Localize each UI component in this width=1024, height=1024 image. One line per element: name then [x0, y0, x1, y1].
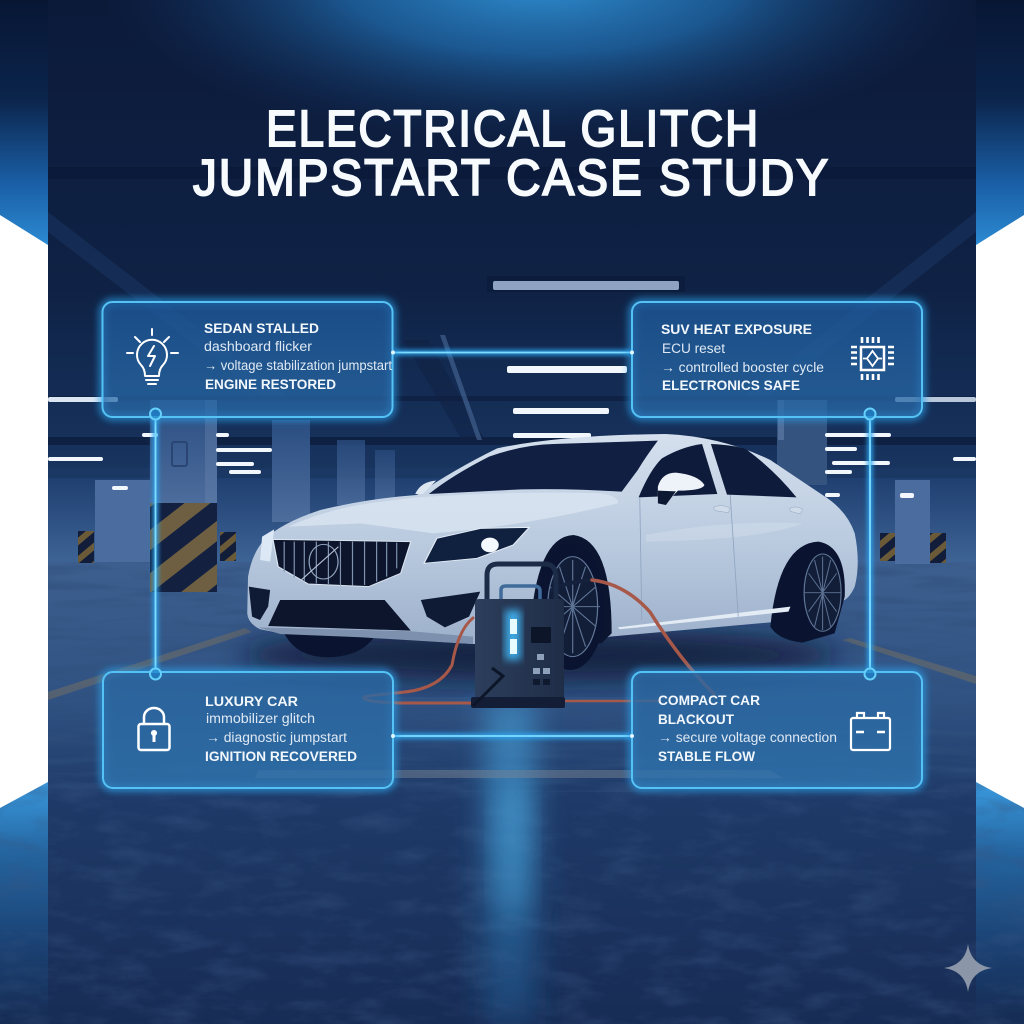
text: suv heat exposure: → controlled booster cycle	[661, 360, 824, 375]
icon: light bulb with bolt	[127, 329, 178, 384]
left bottom blue side band	[0, 782, 48, 1024]
garage ceiling	[48, 0, 976, 480]
wing mirror	[658, 473, 704, 503]
handle	[487, 564, 556, 602]
panel: suv heat exposure	[632, 302, 922, 417]
panel: compact car blackout	[632, 672, 922, 788]
text: compact car blackout	[658, 693, 837, 764]
text: suv heat exposure	[661, 322, 824, 393]
front side window	[639, 444, 717, 497]
text: suv heat exposure: ELECTRONICS SAFE	[662, 378, 800, 393]
garage floor	[0, 562, 1024, 1024]
red jumper cables	[364, 580, 714, 703]
lower air intake	[268, 600, 411, 631]
parking pillars	[78, 400, 946, 592]
text: luxury car: LUXURY CAR	[205, 694, 298, 709]
connector lines	[156, 352, 870, 736]
ceiling lights	[48, 276, 976, 498]
connector nodes	[150, 350, 876, 738]
text: luxury car	[205, 694, 357, 764]
icon: sparkle watermark	[944, 944, 992, 992]
text: sedan stalled: SEDAN STALLED	[204, 321, 319, 336]
bumper lip	[258, 627, 473, 644]
text: compact car blackout: COMPACT CAR	[658, 693, 760, 708]
door lines	[640, 495, 738, 620]
front wheel arch	[529, 535, 612, 647]
text: sedan stalled: → voltage stabilization jumpstart	[204, 358, 392, 373]
right top blue side band	[976, 0, 1024, 245]
icon: padlock	[138, 708, 170, 750]
panel: luxury car	[103, 672, 393, 788]
text: sedan stalled: ENGINE RESTORED	[205, 377, 336, 392]
text: compact car blackout: → secure voltage connection	[658, 730, 837, 745]
text: compact car blackout: STABLE FLOW	[658, 749, 755, 764]
text: compact car blackout: BLACKOUT	[658, 712, 735, 727]
text: suv heat exposure: SUV HEAT EXPOSURE	[661, 322, 812, 337]
back wall	[48, 478, 976, 564]
title: ELECTRICAL GLITCH	[266, 100, 760, 157]
left fog vent	[249, 587, 270, 620]
clamp lead	[473, 668, 503, 706]
buttons	[533, 654, 550, 685]
right fog vent	[421, 592, 480, 627]
text: sedan stalled: dashboard flicker	[204, 339, 313, 354]
far headlight	[260, 529, 274, 562]
front wheel	[536, 543, 605, 670]
right bottom blue side band	[976, 782, 1024, 1024]
headlight	[424, 527, 529, 563]
white sedan	[247, 434, 858, 670]
car body	[247, 434, 858, 644]
floor shadow beneath car	[240, 629, 840, 681]
title: JUMPSTART CASE STUDY	[193, 149, 830, 206]
text: sedan stalled	[204, 321, 392, 392]
portable jump starter	[471, 564, 565, 708]
hood highlight	[288, 493, 618, 533]
left top blue side band	[0, 0, 48, 245]
rear side window	[711, 444, 796, 497]
icon: car battery	[851, 713, 890, 750]
text: luxury car: IGNITION RECOVERED	[205, 749, 357, 764]
panel: sedan stalled	[102, 302, 392, 417]
title	[193, 100, 830, 206]
door reflection	[646, 523, 803, 542]
front left tyre	[284, 633, 375, 657]
icon: microchip	[851, 337, 894, 380]
rear wheel arch and tyre	[770, 542, 845, 643]
text: luxury car: immobilizer glitch	[206, 711, 315, 726]
case	[475, 599, 564, 706]
grille	[273, 539, 411, 587]
door handles	[713, 506, 803, 514]
text: suv heat exposure: ECU reset	[662, 341, 725, 356]
side sill	[618, 607, 790, 629]
display	[531, 627, 551, 643]
glowing light bars	[505, 610, 521, 660]
text: luxury car: → diagnostic jumpstart	[206, 730, 347, 745]
windshield	[429, 441, 658, 494]
small far mirror	[415, 481, 436, 494]
